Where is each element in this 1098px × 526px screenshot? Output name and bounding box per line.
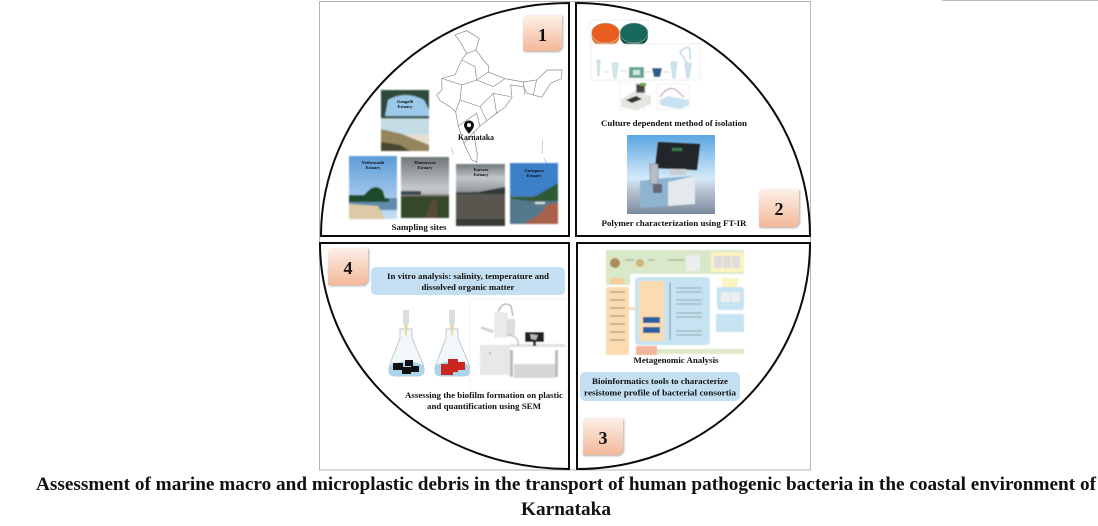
callout: bioinformatics tools: Bioinformatics tools to characterize: [592, 377, 728, 386]
photo: Nethravathi Estuary: [349, 156, 397, 219]
image: thermal cycler: [620, 83, 651, 110]
panel: metagenomic analysis: [577, 243, 810, 469]
title: Karnataka: [521, 500, 611, 520]
badge 4: 4: [344, 258, 352, 278]
diagram: isolation workflow: [591, 44, 700, 80]
caption: metagenomic analysis: Metagenomic Analysis: [634, 356, 718, 365]
photo: Nethravathi Estuary: Nethravathi: [362, 160, 385, 165]
photo: Honnavara Estuary: [401, 157, 449, 218]
photo: Karwar Estuary: Karwar: [474, 167, 488, 172]
image: flask with black plastic: [389, 310, 424, 376]
badge 1: 1: [538, 25, 547, 45]
photo: Honnavara Estuary: Estuary: [418, 165, 433, 170]
badge 2: [759, 189, 799, 227]
image: SEM instrument: [470, 299, 567, 391]
badge 2: 2: [774, 199, 784, 219]
badge 4: [328, 248, 368, 285]
photo: Gurupura Estuary: Estuary: [527, 173, 542, 178]
label: Karnataka: Karnataka: [458, 133, 494, 142]
photo: Karwar Estuary: Estuary: [474, 172, 489, 177]
caption: biofilm assessment: and quantification using SEM: [427, 402, 541, 411]
panel: in vitro analysis and SEM: [320, 243, 569, 469]
diagram: metagenomic workflow: [606, 250, 744, 355]
caption: Sampling sites: Sampling sites: [392, 223, 446, 232]
callout: in vitro analysis: [371, 267, 565, 295]
callout: bioinformatics tools: [580, 372, 740, 401]
photo: Gangolli Estuary: Gangolli: [397, 99, 414, 104]
callout: in vitro analysis: dissolved organic matter: [422, 283, 515, 292]
callout: bioinformatics tools: resistome profile of bacterial consortia: [584, 388, 736, 398]
badge 3: 3: [598, 428, 608, 448]
photo: Gangolli Estuary: [381, 90, 429, 151]
icon: Karnataka location pin: [464, 120, 474, 134]
title: [36, 475, 1097, 520]
panel: sampling sites: [321, 3, 569, 236]
caption: culture dependent method: Culture dependent method of isolation: [601, 119, 747, 128]
photo: Gangolli Estuary: Estuary: [398, 104, 413, 109]
photo: Karwar Estuary: [456, 164, 505, 226]
photo: Nethravathi Estuary: Estuary: [366, 165, 381, 170]
title: Assessment of marine macro and microplastic debris in the transport of human pathogenic bacteria in the coastal environment of: [36, 475, 1097, 495]
caption: biofilm assessment: Assessing the biofilm formation on plastic: [405, 391, 563, 400]
badge 1: [523, 15, 562, 51]
photo: Gurupura Estuary: [510, 163, 558, 224]
caption: biofilm assessment: [405, 391, 563, 411]
image: FT-IR instrument: [627, 135, 715, 214]
image: culture plates: [590, 20, 648, 47]
panel: isolation and FT-IR: [576, 3, 810, 236]
icon: India map: [437, 31, 562, 163]
image: gel electrophoresis: [657, 84, 689, 109]
badge 3: [583, 418, 623, 455]
photo: Honnavara Estuary: Honnavara: [414, 160, 436, 165]
caption: polymer characterization: Polymer characterization using FT-IR: [602, 219, 747, 228]
callout: in vitro analysis: In vitro analysis: salinity, temperature and: [387, 272, 549, 281]
image: flask with red plastic: [435, 310, 470, 376]
photo: Gurupura Estuary: Gurupura: [524, 168, 544, 173]
